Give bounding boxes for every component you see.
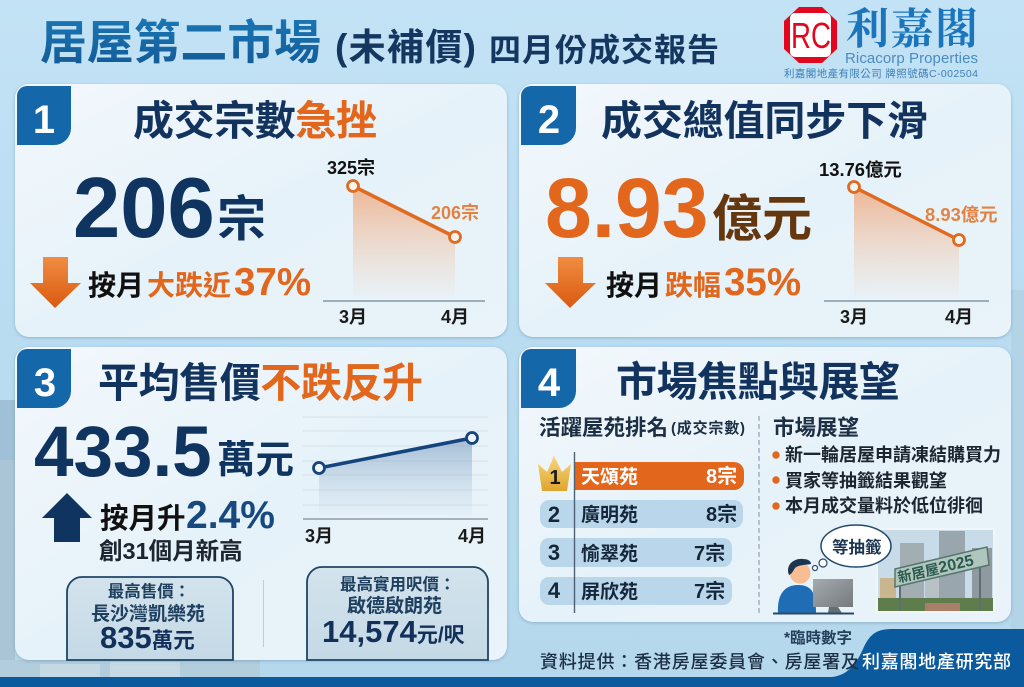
- footer: blue corner shape: [832, 629, 1024, 677]
- badge 2: [521, 86, 576, 145]
- heading 2: 成交總值同步下滑: [601, 98, 928, 144]
- panel 3: average price: [15, 347, 507, 660]
- line chart 2: 3月: [840, 307, 868, 327]
- big number 8.93: 億元: [712, 191, 812, 247]
- change text: 大跌近: [147, 270, 231, 301]
- change text: 37%: [234, 261, 311, 304]
- ranking row 3: 愉翠苑: [581, 542, 638, 565]
- logo: Ricacorp Properties: RC: [791, 15, 831, 56]
- callout: highest unit price: 啟德啟朗苑: [347, 594, 442, 617]
- callout: highest unit price: 14,574元/呎: [322, 614, 465, 649]
- data source: 資料提供：香港房屋委員會、房屋署及: [540, 652, 859, 672]
- outlook list: [772, 415, 1001, 516]
- badge 4: [521, 349, 576, 408]
- big number 433.5: [34, 413, 294, 492]
- ranking row 4: 4: [548, 578, 561, 603]
- ranking row 1: 天頌苑: [581, 466, 638, 488]
- line chart 1: 4月: [441, 307, 469, 327]
- ranking row 2: 8宗: [706, 502, 737, 526]
- logo: Ricacorp Properties: 利嘉閣: [846, 6, 978, 54]
- ranking row 3: [540, 538, 732, 567]
- icon: up arrow: [42, 493, 92, 542]
- big number 206: 宗: [217, 193, 266, 247]
- line chart 1: 325宗: [327, 157, 375, 178]
- logo: Ricacorp Properties: [784, 6, 978, 80]
- ranking row 1: 8宗: [706, 464, 737, 488]
- change text: 跌幅: [665, 270, 721, 301]
- panel 2: transaction value: [519, 84, 1011, 337]
- change text: 創31個月新高: [99, 538, 243, 564]
- outlook list: 新一輪居屋申請凍結購買力: [785, 444, 1001, 465]
- big number 433.5: 433.5: [34, 413, 212, 492]
- icon: down arrow: [30, 257, 81, 308]
- change text: 按月升: [100, 503, 186, 535]
- line chart 3: [303, 417, 488, 546]
- big number 8.93: 8.93: [545, 161, 708, 255]
- illustration: person at computer: [773, 559, 854, 614]
- callout: highest unit price: 最高實用呎價：: [340, 574, 456, 594]
- change text: [606, 261, 801, 304]
- ranking row 1: 1: [549, 467, 561, 489]
- line chart 3: 4月: [458, 526, 486, 546]
- outlook list: 買家等抽籤結果觀望: [785, 470, 947, 491]
- footnote: *臨時數字: [784, 628, 852, 647]
- change text: 按月: [88, 270, 144, 301]
- ranking row 4: [540, 577, 732, 605]
- estate ranking heading: (成交宗數): [671, 419, 745, 437]
- callout: highest price: [67, 577, 233, 660]
- ranking row 3: 3: [548, 540, 560, 565]
- callout: highest price: 835萬元: [100, 620, 195, 655]
- big number 206: 206: [73, 161, 215, 256]
- data source: [540, 652, 1011, 672]
- illustration: new HOS photo: [876, 528, 995, 613]
- line chart 1: 3月: [339, 307, 367, 327]
- badge 3: 3: [34, 361, 56, 405]
- change text: 按月: [606, 270, 662, 301]
- title: [40, 16, 719, 69]
- line chart 2: 8.93億元: [925, 204, 998, 225]
- change text: 2.4%: [186, 494, 275, 537]
- big number 433.5: 萬元: [217, 439, 294, 482]
- change text: 35%: [724, 261, 801, 304]
- badge 2: 2: [538, 98, 560, 142]
- estate ranking heading: 活躍屋苑排名: [539, 416, 668, 440]
- panel 1: transaction count: [15, 84, 507, 337]
- line chart 1: [323, 157, 485, 327]
- title: 四月份成交報告: [489, 32, 719, 68]
- line chart 2: 13.76億元: [819, 159, 902, 180]
- badge 4: 4: [538, 361, 561, 405]
- title: 居屋第二市場: [40, 16, 321, 69]
- heading 1: 成交宗數急挫: [133, 98, 377, 144]
- ranking row 4: 屏欣苑: [581, 581, 638, 603]
- logo: Ricacorp Properties: 利嘉閣地產有限公司 牌照號碼C-002504: [784, 67, 978, 80]
- icon: down arrow: [545, 257, 596, 308]
- change text: [88, 261, 311, 304]
- panel 4: market focus and outlook: [519, 347, 1011, 622]
- illustration: thought bubble: [812, 525, 891, 570]
- callout: highest price: 長沙灣凱樂苑: [91, 603, 205, 625]
- icon: crown: [538, 456, 571, 491]
- outlook list: 本月成交量料於低位徘徊: [785, 495, 983, 516]
- data source: 利嘉閣地產研究部: [862, 652, 1011, 672]
- change text: [99, 494, 275, 564]
- big number 8.93: [545, 161, 812, 255]
- line chart 2: 4月: [945, 307, 973, 327]
- ranking row 2: 2: [548, 502, 560, 527]
- ranking row 4: 7宗: [694, 579, 725, 603]
- line chart 1: 206宗: [431, 202, 479, 223]
- line chart 3: 3月: [305, 526, 333, 546]
- callout: highest unit price: [307, 567, 488, 660]
- illustration: new HOS photo: 新居屋2025: [896, 552, 976, 586]
- ranking row 2: 廣明苑: [581, 504, 638, 526]
- title: (未補價): [335, 27, 476, 68]
- badge 1: [17, 86, 71, 145]
- badge 1: 1: [33, 98, 55, 142]
- ranking row 2: [540, 500, 743, 528]
- ranking row 3: 7宗: [694, 541, 725, 565]
- line chart 2: [819, 159, 998, 327]
- estate ranking heading: [539, 416, 745, 440]
- illustration: thought bubble: 等抽籤: [832, 537, 882, 557]
- callout: highest price: 最高售價：: [108, 581, 190, 601]
- outlook list: 市場展望: [773, 415, 859, 440]
- badge 3: [17, 349, 71, 408]
- ranking row 1: [538, 456, 744, 491]
- heading 3: 平均售價不跌反升: [98, 360, 423, 406]
- heading 4: 市場焦點與展望: [616, 359, 900, 405]
- logo: Ricacorp Properties: Ricacorp Properties: [845, 50, 978, 67]
